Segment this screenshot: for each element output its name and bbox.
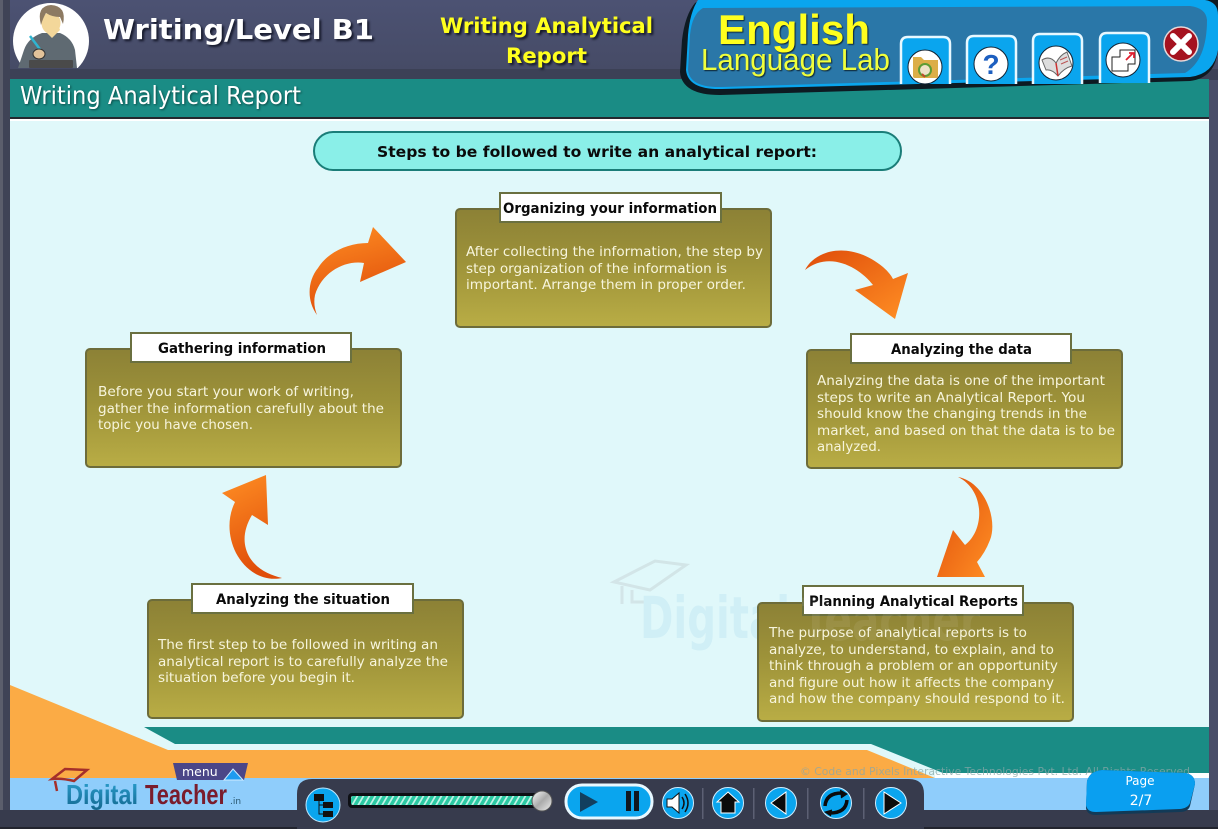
progress bar bbox=[348, 791, 552, 811]
panel: organizing your information: step organization of the information is bbox=[466, 261, 727, 277]
heading: writing level: Writing/Level B1 bbox=[103, 13, 374, 46]
icon: back bbox=[766, 788, 796, 818]
logo: digital teacher: Digital bbox=[66, 779, 138, 810]
footer light blue strip bbox=[10, 778, 1209, 810]
panel: analyzing the data bbox=[807, 334, 1122, 468]
copyright: © Code and Pixels Interactive Technologies Pvt. Ltd. All Rights Reserved bbox=[800, 765, 1190, 778]
panel: planning analytical reports: think through a problem or an opportunity bbox=[769, 658, 1058, 674]
logo: digital teacher: .in bbox=[230, 797, 241, 807]
panel: analyzing the situation: analytical report is to carefully analyze the bbox=[158, 654, 448, 670]
section title bar: Writing Analytical Report bbox=[20, 81, 301, 110]
pill heading: Steps to be followed to write an analytical report: bbox=[377, 143, 817, 161]
panel: planning analytical reports bbox=[758, 586, 1073, 721]
panel: planning analytical reports: Planning Analytical Reports bbox=[809, 594, 1018, 610]
content background bbox=[10, 121, 1209, 778]
icon: help tab bbox=[967, 36, 1016, 84]
menu tab: menu bbox=[182, 764, 218, 779]
arrow: organizing to analyzing bbox=[805, 251, 908, 319]
arrow: gathering to organizing bbox=[310, 227, 406, 315]
play and pause control bbox=[566, 785, 652, 818]
panel: gathering information: Before you start your work of writing, bbox=[98, 384, 354, 400]
icon: folder tab bbox=[901, 37, 950, 84]
panel: analyzing the situation: situation before you begin it. bbox=[158, 670, 355, 686]
panel: english language lab logo: Language Lab bbox=[701, 42, 890, 77]
page badge bbox=[1086, 770, 1195, 815]
icon: help tab: ? bbox=[982, 49, 1000, 80]
menu tab bbox=[173, 763, 248, 780]
icon: close button bbox=[1164, 27, 1198, 61]
icon: window tab bbox=[1100, 33, 1149, 83]
icon: volume bbox=[662, 788, 694, 818]
heading: lesson title: Report bbox=[506, 44, 587, 68]
panel: planning analytical reports: and figure out how it affects the company bbox=[769, 675, 1054, 691]
panel: planning analytical reports: and how the company should respond to it. bbox=[769, 691, 1065, 707]
decorative orange and teal bands bbox=[10, 685, 1209, 778]
logo: digital teacher: Teacher bbox=[145, 779, 227, 810]
panel: analyzing the situation: The first step to be followed in writing an bbox=[157, 637, 438, 653]
panel: english language lab logo bbox=[680, 0, 1218, 95]
icon: refresh bbox=[820, 788, 852, 818]
icon: book tab bbox=[1033, 34, 1082, 84]
arrow: situation to gathering bbox=[222, 475, 282, 579]
panel: planning analytical reports: analyze, to understand, to explain, and to bbox=[769, 642, 1054, 658]
icon: home bbox=[712, 788, 744, 818]
panel: english language lab logo: English bbox=[718, 6, 870, 53]
panel: analyzing the data: Analyzing the data bbox=[891, 342, 1032, 358]
heading: lesson title bbox=[440, 14, 653, 68]
panel: gathering information bbox=[86, 333, 401, 467]
panel: gathering information: Gathering information bbox=[158, 341, 326, 357]
page badge: Page bbox=[1125, 774, 1155, 788]
panel: organizing your information: Organizing your information bbox=[503, 201, 717, 217]
pill heading bbox=[314, 132, 901, 170]
logo: digital teacher bbox=[52, 769, 241, 810]
media control bar bbox=[297, 779, 924, 829]
section title bar bbox=[10, 79, 1209, 121]
panel: organizing your information bbox=[456, 193, 771, 327]
watermark overlay on panel: Teacher bbox=[802, 586, 980, 654]
panel: analyzing the situation: Analyzing the situation bbox=[216, 592, 390, 608]
heading: lesson title: Writing Analytical bbox=[440, 14, 653, 38]
panel: planning analytical reports: The purpose of analytical reports is to bbox=[768, 625, 1027, 641]
panel: analyzing the situation bbox=[148, 584, 463, 718]
page badge: 2/7 bbox=[1130, 793, 1152, 809]
panel: analyzing the data: should know the changing trends in the bbox=[817, 406, 1087, 422]
panel: analyzing the data: Analyzing the data is one of the important bbox=[817, 373, 1105, 389]
panel: analyzing the data: steps to write an Analytical Report. You bbox=[817, 390, 1085, 406]
panel: analyzing the data: analyzed. bbox=[817, 439, 881, 455]
panel: gathering information: gather the information carefully about the bbox=[98, 401, 384, 417]
icon: forward bbox=[876, 788, 906, 818]
watermark: Digital bbox=[640, 584, 790, 652]
panel: organizing your information: After collecting the information, the step by bbox=[466, 244, 763, 260]
watermark bbox=[614, 561, 790, 652]
arrow: analyzing to planning bbox=[937, 477, 992, 577]
panel: organizing your information: important. Arrange them in proper order. bbox=[466, 277, 746, 293]
panel: gathering information: topic you have chosen. bbox=[98, 417, 253, 433]
icon: student avatar bbox=[13, 3, 89, 68]
panel: analyzing the data: market, and based on that the data is to be bbox=[817, 423, 1115, 439]
icon: tree menu bbox=[306, 788, 340, 822]
